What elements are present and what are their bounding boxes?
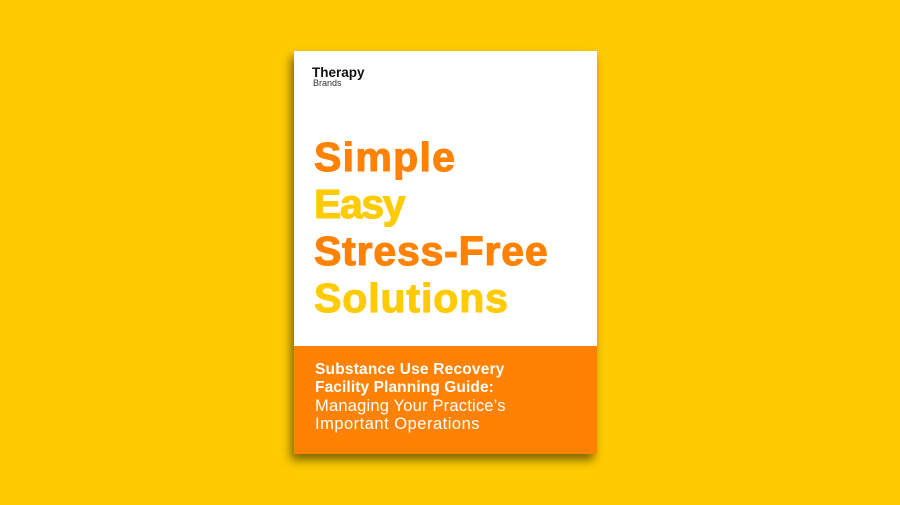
title: Simple Easy Stress-Free Solutions: Easy bbox=[314, 181, 404, 227]
subtitle text: Important Operations bbox=[315, 415, 480, 433]
book cover bbox=[294, 51, 597, 454]
panel: orange subtitle band bbox=[294, 346, 597, 454]
subtitle text: Managing Your Practice’s bbox=[315, 397, 506, 415]
subtitle text bbox=[315, 361, 506, 433]
logo: Therapy Brands: Brands bbox=[313, 78, 342, 88]
subtitle text: Facility Planning Guide: bbox=[315, 379, 494, 396]
logo: Therapy Brands bbox=[312, 65, 365, 88]
title: Simple Easy Stress-Free Solutions bbox=[314, 134, 548, 321]
subtitle text: Substance Use Recovery bbox=[315, 361, 505, 378]
title: Simple Easy Stress-Free Solutions: Solutions bbox=[314, 275, 509, 321]
title: Simple Easy Stress-Free Solutions: Simple bbox=[314, 134, 456, 180]
title: Simple Easy Stress-Free Solutions: Stress-Free bbox=[314, 228, 548, 274]
logo: Therapy Brands: Therapy bbox=[312, 65, 365, 80]
